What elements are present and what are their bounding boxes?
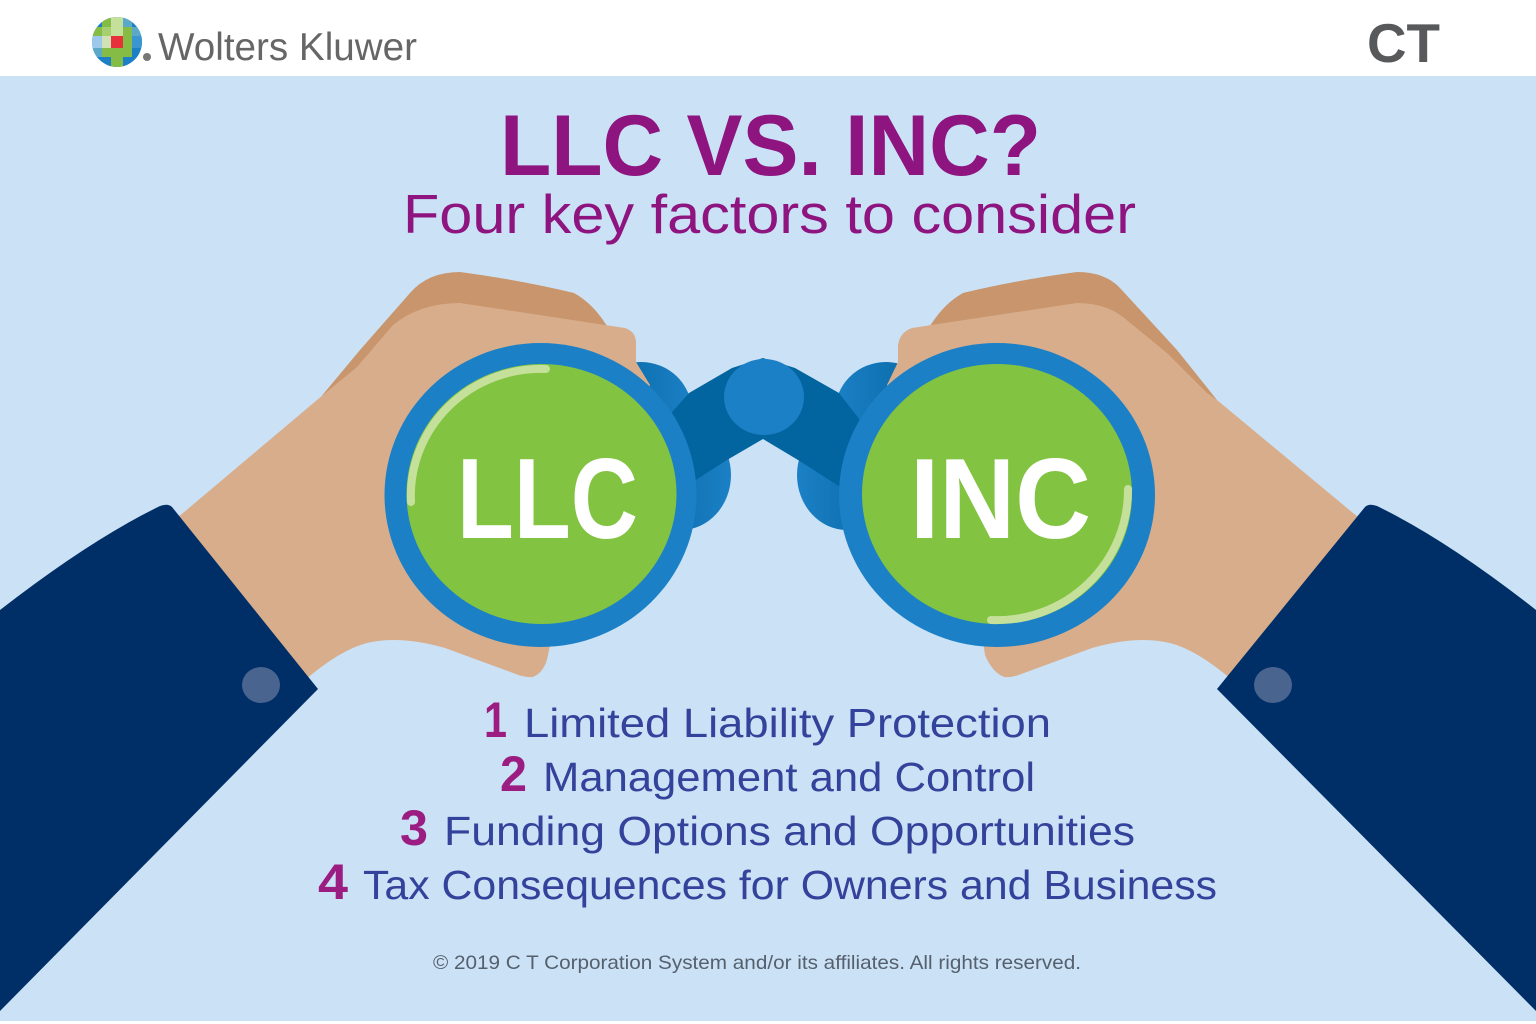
logo: CT: CT <box>1367 12 1440 74</box>
factor 4: Tax Consequences for Owners and Business <box>363 862 1217 908</box>
left lens: LLC <box>384 343 696 647</box>
bridge <box>665 358 860 490</box>
hand <box>887 303 1387 680</box>
factor 4: 4 <box>318 854 348 910</box>
icon: registered dot <box>143 53 151 61</box>
lens highlight <box>991 489 1128 620</box>
lens label: INC <box>910 436 1091 563</box>
cuff button <box>1254 667 1292 703</box>
factor list <box>318 692 1217 910</box>
hand back <box>887 272 1217 460</box>
sleeve <box>1217 505 1536 1011</box>
lens label: LLC <box>457 436 638 563</box>
left hand and sleeve <box>0 272 650 1011</box>
icon: checkered globe <box>92 17 142 67</box>
rear barrels <box>590 362 937 530</box>
binoculars <box>590 358 937 530</box>
factor 3: Funding Options and Opportunities <box>444 808 1135 854</box>
cuff button <box>242 667 280 703</box>
factor 1: 1 <box>484 692 507 748</box>
factor 1: Limited Liability Protection <box>524 700 1051 746</box>
factor 1 <box>484 692 1051 748</box>
lens ring <box>839 343 1155 647</box>
right lens: INC <box>839 343 1155 647</box>
factor 2: 2 <box>500 746 527 802</box>
subtitle: Four key factors to consider <box>403 183 1136 245</box>
logo: Wolters Kluwer <box>90 15 417 69</box>
lens highlight <box>411 369 546 502</box>
logo wordmark: Wolters Kluwer <box>158 26 417 69</box>
lens glass <box>862 364 1132 624</box>
hand <box>150 303 650 680</box>
factor 3: 3 <box>400 800 428 856</box>
copyright notice: © 2019 C T Corporation System and/or its affiliates. All rights reserved. <box>433 952 1081 974</box>
title: LLC VS. INC? <box>500 98 1041 194</box>
right hand and sleeve <box>887 272 1536 1011</box>
hand back <box>320 272 650 460</box>
lens ring <box>384 343 696 647</box>
hinge <box>724 359 804 435</box>
sleeve <box>0 505 318 1011</box>
factor 2: Management and Control <box>543 754 1035 800</box>
lens glass <box>406 364 676 624</box>
